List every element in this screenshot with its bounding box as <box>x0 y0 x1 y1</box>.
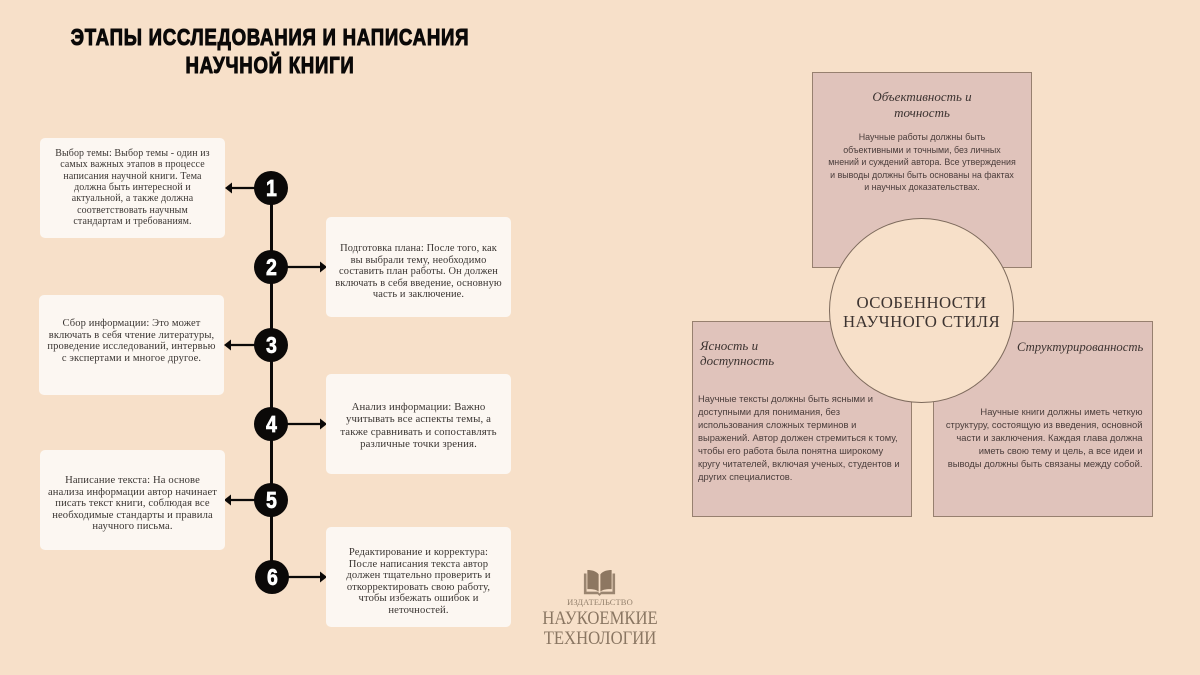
panel text: clarity <box>698 393 900 482</box>
step number 3: 3 <box>266 332 276 358</box>
card: step 1 topic choice <box>40 138 225 238</box>
card: step 4 analysis: учитывать все аспекты темы, а <box>346 413 491 425</box>
card: step 4 analysis <box>326 374 511 474</box>
card: step 1 topic choice: самых важных этапов в процессе <box>60 159 205 170</box>
panel text: clarity: использования сложных терминов и <box>698 419 856 430</box>
panel text: clarity: кругу читателей, включая ученых, студентов и <box>698 458 900 469</box>
publisher logo <box>542 570 658 648</box>
card: step 6 editing: После написания текста автор <box>349 559 488 570</box>
step number 2: 2 <box>266 254 276 280</box>
panel text: objectivity <box>828 132 1016 192</box>
panel heading: objectivity: Объективность и <box>872 89 972 104</box>
panel text: objectivity: объективными и точными, без личных <box>843 144 1001 154</box>
step number 5 <box>254 483 288 517</box>
panel text: objectivity: и научных доказательствах. <box>864 182 980 192</box>
card: step 5 writing: анализа информации автор начинает <box>48 487 217 498</box>
card: step 4 analysis: также сравнивать и сопоставлять <box>340 426 497 438</box>
panel text: objectivity: и выводы должны быть основаны на фактах <box>830 170 1014 180</box>
icon: open book <box>584 570 616 596</box>
step number 5: 5 <box>266 487 276 513</box>
card: step 5 writing <box>40 450 225 550</box>
arrow: step 2 <box>288 262 326 272</box>
logo text: publisher: ИЗДАТЕЛЬСТВО <box>567 597 633 607</box>
logo text: name <box>542 609 658 648</box>
center circle: НАУЧНОГО СТИЛЯ <box>843 312 1000 331</box>
card: step 1 topic choice: соответствовать научным <box>77 205 188 216</box>
step number 4: 4 <box>266 411 276 437</box>
card: step 3 information gathering: с экспертами и многое другое. <box>62 353 201 364</box>
timeline spine <box>270 204 273 560</box>
panel: objectivity <box>812 72 1032 268</box>
logo text: name: НАУКОЕМКИЕ <box>542 609 658 629</box>
panel heading: clarity: Ясность и <box>700 338 758 353</box>
arrow: step 5 <box>225 494 254 506</box>
panel text: objectivity: Научные работы должны быть <box>859 132 985 142</box>
panel text: structure: выводы должны быть связаны между собой. <box>948 458 1142 469</box>
title <box>70 24 469 78</box>
card: step 6 editing: откорректировать свою работу, <box>347 582 490 593</box>
card: step 5 writing: научного письма. <box>92 521 173 532</box>
center circle: ОСОБЕННОСТИ <box>856 293 987 312</box>
panel heading: objectivity: точность <box>894 105 950 120</box>
card: step 2 plan: часть и заключение. <box>373 289 464 300</box>
card: step 6 editing <box>326 527 511 627</box>
panel text: clarity: доступными для понимания, без <box>698 406 840 417</box>
arrow: step 4 <box>288 418 326 430</box>
card: step 6 editing: неточностей. <box>388 605 449 616</box>
logo text: name: ТЕХНОЛОГИИ <box>544 628 656 648</box>
panel: clarity <box>692 321 912 517</box>
card: step 3 information gathering <box>39 295 224 395</box>
card: step 1 topic choice: должна быть интересной и <box>74 182 191 193</box>
card: step 4 analysis: различные точки зрения. <box>360 438 477 450</box>
card: step 1 topic choice: стандартам и требованиям. <box>73 216 192 227</box>
card: step 2 plan: составить план работы. Он должен <box>339 266 498 277</box>
title: ЭТАПЫ ИССЛЕДОВАНИЯ И НАПИСАНИЯ <box>71 24 469 50</box>
card: step 6 editing: чтобы избежать ошибок и <box>359 593 478 604</box>
panel text: structure: структуру, состоящую из введения, основной <box>946 419 1142 430</box>
step number 1: 1 <box>266 175 276 201</box>
panel heading: clarity: доступность <box>700 353 774 368</box>
card: step 2 plan: включать в себя введение, основную <box>335 278 502 289</box>
panel text: clarity: других специалистов. <box>698 471 792 482</box>
panel text: structure: части и заключения. Каждая глава должна <box>956 432 1142 443</box>
step number 6: 6 <box>267 564 277 590</box>
step number 4 <box>254 407 288 441</box>
card: step 6 editing: Редактирование и корректура: <box>349 547 488 558</box>
card: step 3 information gathering: Сбор информации: Это может <box>62 318 200 329</box>
panel: structure <box>933 321 1152 517</box>
card: step 2 plan: вы выбрали тему, необходимо <box>351 255 486 266</box>
center circle <box>829 218 1014 403</box>
panel text: clarity: выражений. Автор должен стремиться к тому, <box>698 432 898 443</box>
card: step 3 information gathering: проведение исследований, интервью <box>47 341 216 352</box>
step number 1 <box>254 171 288 205</box>
card: step 6 editing: должен тщательно проверить и <box>346 570 491 581</box>
arrow: step 6 <box>288 572 326 582</box>
card: step 2 plan: Подготовка плана: После того, как <box>340 243 497 254</box>
card: step 2 plan <box>326 217 511 317</box>
panel text: structure: иметь свою тему и цель, а все идеи и <box>979 445 1142 456</box>
step number 6 <box>255 560 289 594</box>
panel heading: objectivity <box>872 89 972 120</box>
step number 2 <box>254 250 288 284</box>
arrow: step 1 <box>225 182 254 194</box>
step number 3 <box>254 328 288 362</box>
panel text: clarity: Научные тексты должны быть ясными и <box>698 393 873 404</box>
card: step 1 topic choice: актуальной, а также должна <box>72 193 193 204</box>
card: step 1 topic choice: Выбор темы: Выбор темы - один из <box>55 148 210 159</box>
title: НАУЧНОЙ КНИГИ <box>185 52 355 78</box>
card: step 5 writing: писать текст книги, соблюдая все <box>55 498 210 509</box>
card: step 3 information gathering: включать в себя чтение литературы, <box>49 330 214 341</box>
card: step 5 writing: Написание текста: На основе <box>65 475 200 486</box>
panel heading: clarity <box>700 338 774 368</box>
panel text: objectivity: мнений и суждений автора. Все утверждения <box>828 157 1016 167</box>
panel heading: structure: Структурированность <box>1017 340 1143 354</box>
panel text: structure <box>946 406 1142 469</box>
card: step 1 topic choice: написания научной книги. Тема <box>63 171 202 182</box>
card: step 4 analysis: Анализ информации: Важно <box>352 401 485 413</box>
card: step 5 writing: необходимые стандарты и правила <box>52 510 213 521</box>
arrow: step 3 <box>224 340 254 350</box>
panel text: clarity: чтобы его работа была понятна широкому <box>698 445 883 456</box>
panel text: structure: Научные книги должны иметь четкую <box>980 406 1142 417</box>
